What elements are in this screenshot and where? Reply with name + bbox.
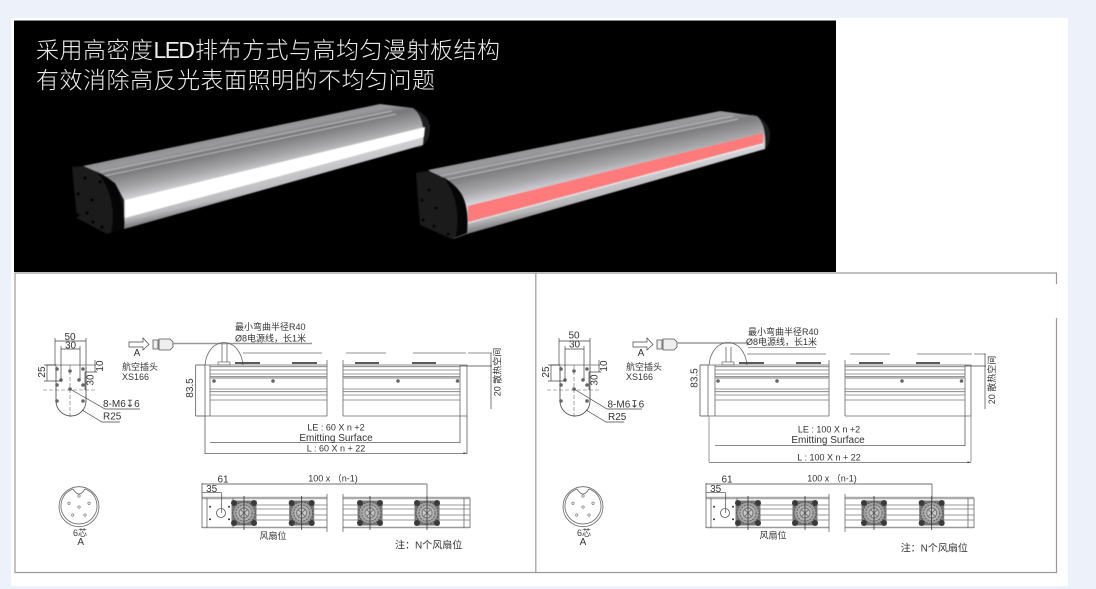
product: white light bar [72,104,430,234]
cable bend note: 最小弯曲半径R40 [748,326,819,337]
connector pin diagram: A [580,537,587,548]
end view with mounting holes: 25 [37,366,48,378]
bottom view with fan positions: 风扇位 [759,530,787,540]
connector and view arrow A: XS166 [122,372,149,382]
end view with mounting holes: 25 [541,366,552,378]
connector and view arrow A: 航空插头 [626,361,662,372]
front view of light bar: L : 60 X n + 22 [307,444,365,454]
connector and view arrow A: A [134,348,141,359]
cable bend note [709,326,819,365]
end view with mounting holes: 30 [86,374,96,386]
panel: drawing frame [15,272,1056,572]
title: product feature description: 采用高密度LED排布方式与高均匀漫射板结构 [36,37,500,63]
connector pin diagram: A [77,537,84,548]
panel: black product banner [14,20,836,272]
front view of light bar: 20 散热空间 [986,356,997,404]
title: product feature description [36,37,500,93]
bottom view with fan positions: 风扇位 [259,530,287,541]
connector pin diagram: 6芯 [73,527,87,538]
front view of light bar: 83.5 [690,368,700,388]
front view of light bar: L : 100 X n + 22 [797,452,861,462]
panel: drawing 100 spacing [541,326,997,554]
end view with mounting holes: 8-M6↧6 [608,400,645,410]
front view of light bar: Emitting Surface [299,433,373,444]
bottom view with fan positions: 100 x （n-1) [308,474,358,484]
bottom view with fan positions: 35 [710,484,722,495]
cable bend note: 最小弯曲半径R40 [235,321,306,332]
end view with mounting holes: 30 [590,374,600,386]
end view with mounting holes [37,332,140,422]
end view with mounting holes: 30 [569,340,580,350]
end view with mounting holes: 50 [568,330,580,342]
front view of light bar: Emitting Surface [791,435,865,446]
bottom view with fan positions: 100 x （n-1) [807,474,857,484]
bottom view with fan positions [706,474,974,554]
connector and view arrow A: 航空插头 [122,361,158,372]
product: red light bar [416,111,770,239]
end view with mounting holes: R25 [608,412,627,423]
end view with mounting holes: 50 [64,332,76,343]
bottom view with fan positions: 61 [721,474,733,486]
front view of light bar: 83.5 [185,378,196,398]
front view of light bar: LE : 100 X n +2 [798,424,860,434]
bottom view with fan positions: 注：N个风扇位 [901,542,968,554]
front view of light bar: LE : 60 X n +2 [307,422,365,432]
panel: drawing 60 spacing [37,321,502,552]
end view with mounting holes: 10 [95,360,106,372]
end view with mounting holes: R25 [103,412,122,422]
end view with mounting holes: 8-M6↧6 [103,399,140,410]
connector and view arrow A [122,338,312,382]
end view with mounting holes: 30 [65,340,76,352]
connector pin diagram [59,487,99,548]
end view with mounting holes [541,330,645,423]
connector and view arrow A: A [638,348,645,359]
bottom view with fan positions: 注：N个风扇位 [395,538,462,552]
front view of light bar [185,348,502,454]
bottom view with fan positions [202,474,470,552]
end view with mounting holes: 10 [599,360,610,372]
connector and view arrow A: XS166 [626,372,653,382]
front view of light bar: 20 散热空间 [492,348,502,396]
cable bend note [205,321,306,365]
connector pin diagram: 6芯 [577,527,591,538]
title: product feature description: 有效消除高反光表面照明的不均匀问题 [36,67,436,93]
connector pin diagram [563,487,603,548]
connector and view arrow A [626,338,816,382]
bottom view with fan positions: 35 [206,484,218,495]
cable bend note: Ø8电源线，长1米 [746,336,817,347]
bottom view with fan positions: 61 [217,474,229,486]
front view of light bar [690,354,997,462]
cable bend note: Ø8电源线，长1米 [235,332,306,344]
